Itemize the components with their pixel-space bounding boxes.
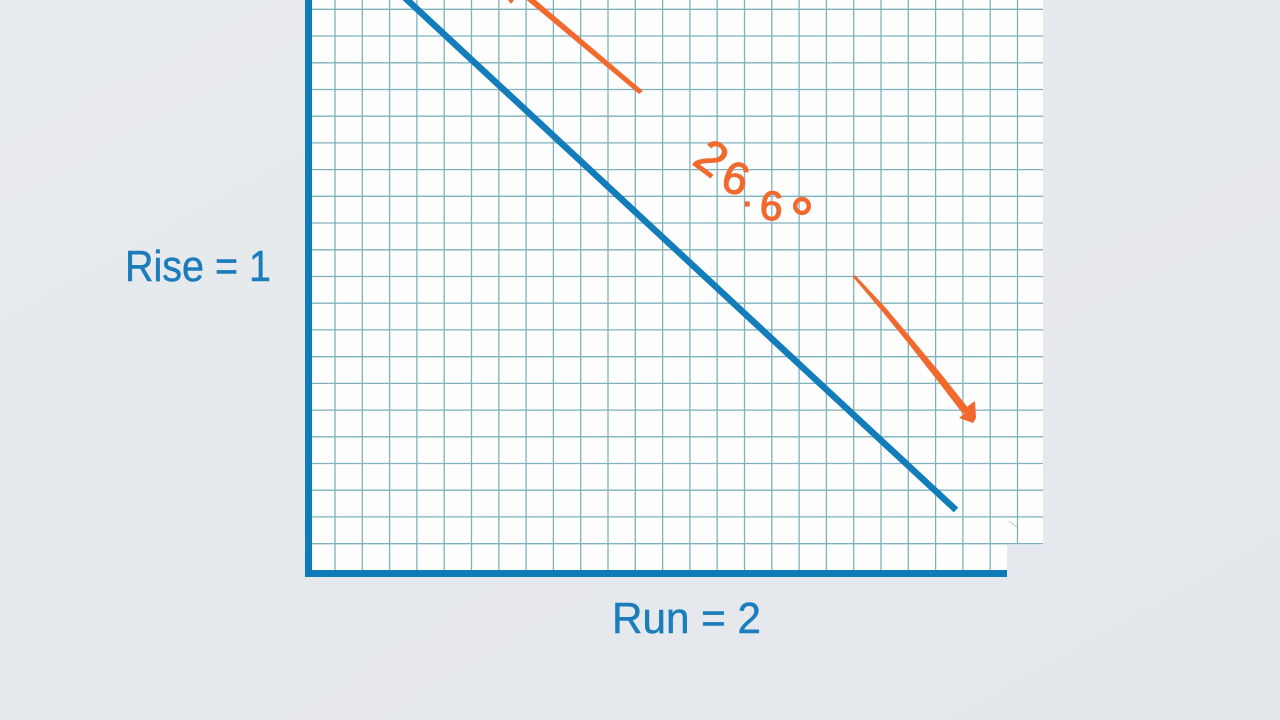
sloped line (403, 0, 956, 510)
panel: graph paper (310, 0, 1043, 572)
arrow: upper orange (508, 0, 643, 94)
angle label: 2 (684, 129, 738, 188)
rise label: Rise = 1 (125, 242, 271, 291)
run label: Run = 2 (612, 594, 761, 643)
angle label: ° (790, 186, 814, 253)
arrow: lower orange (853, 275, 976, 423)
angle label: 6 (758, 182, 784, 230)
angle label: 6 (716, 150, 755, 206)
horizontal axis (305, 570, 1007, 577)
vertical axis (305, 0, 312, 577)
angle label: . (742, 173, 753, 215)
